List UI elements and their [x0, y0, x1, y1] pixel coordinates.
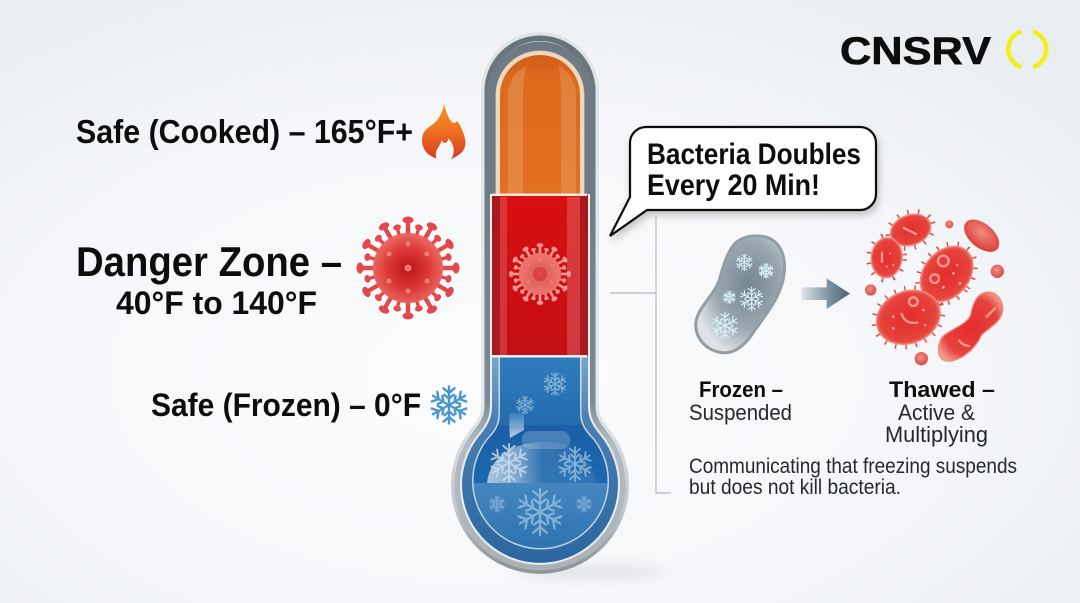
- heading: safe cooked: Safe (Cooked) – 165°F+: [76, 113, 413, 150]
- icon: frozen bacterium: [696, 236, 785, 353]
- label: thawed: Multiplying: [885, 422, 988, 447]
- thermometer rim bands: [462, 50, 618, 563]
- icon: flame: [422, 104, 465, 159]
- label: frozen: Suspended: [689, 400, 792, 425]
- caption: Communicating that freezing suspends: [689, 455, 1017, 478]
- caption: but does not kill bacteria.: [689, 476, 901, 499]
- label: thawed: [885, 377, 995, 447]
- arrow: [802, 278, 850, 309]
- thermometer liquid: [474, 55, 608, 548]
- label: frozen: [689, 377, 792, 425]
- label: thawed: Thawed –: [889, 377, 995, 402]
- icon: virus: [357, 217, 459, 319]
- thermometer collar over orange zone: [491, 46, 589, 194]
- heading: danger zone: Danger Zone –: [76, 238, 342, 285]
- icons: snowflakes in thermometer: [489, 372, 592, 535]
- label: thawed: Active &: [898, 400, 975, 425]
- heading: safe frozen: Safe (Frozen) – 0°F: [151, 387, 421, 423]
- heading: danger zone: 40°F to 140°F: [116, 285, 317, 321]
- speech bubble: Bacteria Doubles: [647, 138, 861, 171]
- logo: [840, 30, 1046, 73]
- speech bubble: Every 20 Min!: [647, 169, 820, 202]
- caption: [689, 455, 1017, 499]
- label: frozen: Frozen –: [699, 377, 783, 402]
- thermometer: [450, 30, 630, 586]
- icon: thawed bacteria: [865, 209, 1005, 365]
- logo: CNSRV: [840, 30, 991, 73]
- heading: danger zone: [76, 238, 342, 321]
- speech bubble: [610, 127, 876, 236]
- icon: virus in thermometer: [509, 243, 571, 305]
- icon: snowflake: [430, 386, 468, 424]
